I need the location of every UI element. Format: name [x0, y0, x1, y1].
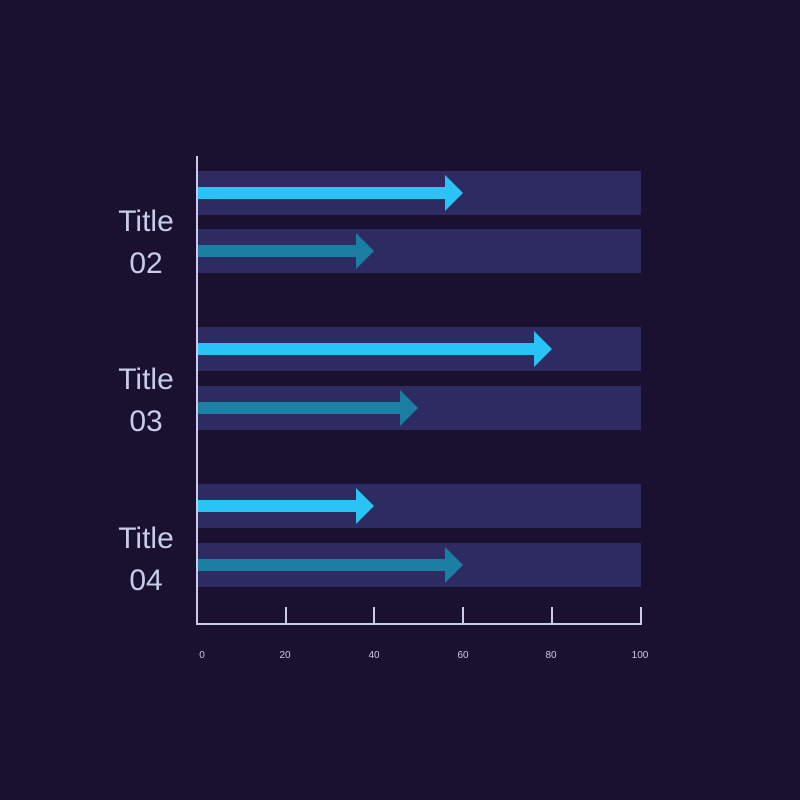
arrow: bar 6	[198, 547, 463, 583]
arrow: bar 5	[198, 488, 374, 524]
axis labels: 100	[632, 650, 649, 661]
arrow: bar 3	[198, 331, 552, 367]
axes	[196, 156, 642, 625]
axis labels: 60	[457, 650, 469, 661]
arrow: bar 1	[198, 175, 463, 211]
axis labels: 80	[545, 650, 557, 661]
title labels: Title	[118, 522, 174, 555]
title labels: 02	[129, 247, 163, 280]
title labels: Title	[118, 205, 174, 238]
title labels: 03	[129, 405, 163, 438]
arrow: bar 4	[198, 390, 418, 426]
bar chart	[198, 171, 641, 587]
axis labels	[199, 650, 649, 661]
axis labels: 20	[279, 650, 291, 661]
arrow: bar 2	[198, 233, 374, 269]
axis labels: 0	[199, 650, 205, 661]
title labels	[118, 205, 174, 597]
title labels: 04	[129, 564, 163, 597]
group: Title 02	[198, 171, 641, 273]
axis labels: 40	[368, 650, 380, 661]
title labels: Title	[118, 363, 174, 396]
group: Title 04	[198, 484, 641, 587]
group: Title 03	[198, 327, 641, 430]
